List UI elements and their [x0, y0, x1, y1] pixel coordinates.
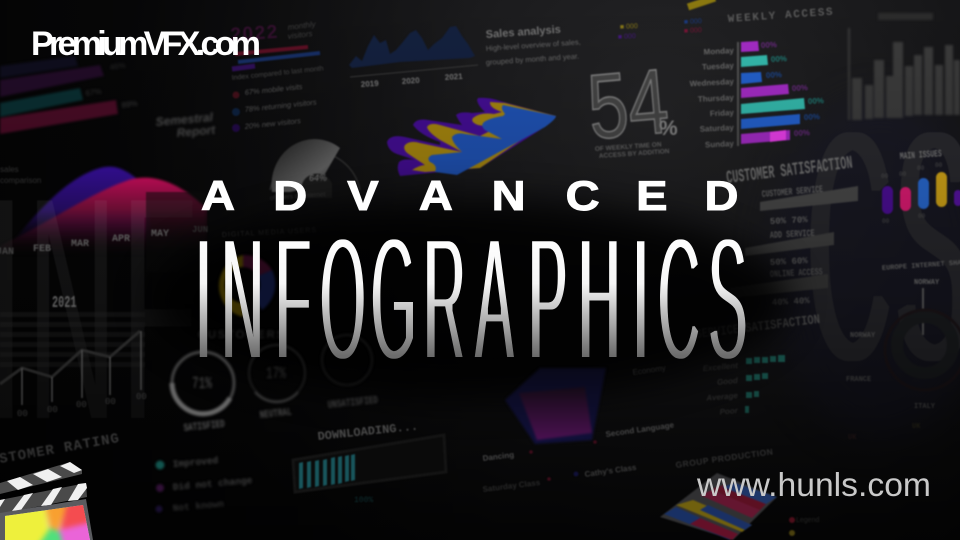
satisfaction rings: NEUTRAL: [259, 405, 293, 421]
mountain chart: [0, 167, 206, 258]
sales analysis text: grouped by month and year.: [486, 52, 579, 67]
month axis labels: JUN: [192, 225, 208, 235]
rating legend: [156, 455, 253, 514]
weekly access bar chart: Tuesday: [702, 61, 735, 72]
chart legend top: ■ 000: [684, 18, 702, 26]
satisfaction rings: 17%: [266, 365, 286, 384]
main issues capsules: [881, 149, 960, 225]
weekly access bar chart: Friday: [710, 108, 735, 118]
month axis labels: MAR: [71, 239, 89, 250]
54 percent stat: 54: [584, 50, 672, 159]
donut chart behind title: [198, 255, 286, 341]
europe internet share with rings: NORWAY: [850, 332, 876, 340]
monthly visitors panel: visitors: [287, 29, 313, 41]
radar labels: Saturday Class: [482, 478, 541, 494]
customer satisfaction panel: CUSTOMER SERVICE: [761, 185, 823, 201]
month axis labels: [0, 165, 208, 258]
sales area chart: 2021: [445, 72, 463, 82]
service satisfaction ratings: SERVICE SATISFACTION: [695, 312, 821, 342]
monthly visitors panel: 2022: [230, 22, 280, 46]
radar labels: Second Language: [605, 420, 675, 439]
line chart: 2021: 00: [17, 409, 28, 419]
title: INFOGRAPHICS: INFOGRAPHICS: [195, 200, 747, 398]
chart legend top: [618, 0, 715, 41]
group production label: [632, 363, 774, 470]
top-left bars: 89%: [121, 99, 138, 110]
radar chart: [505, 368, 606, 444]
weekly access bar chart: 00%: [771, 54, 787, 64]
customer satisfaction panel: CUSTOMER SATISFACTION: [725, 154, 854, 189]
chart legend top: ■ 000: [618, 33, 636, 41]
radar labels: [482, 420, 675, 494]
stacked table chart: Legend: [796, 517, 819, 524]
donut chart: 64%: [309, 173, 327, 183]
chart legend top: ■ 000: [684, 27, 702, 35]
line chart: 2021: [0, 294, 147, 419]
grey column chart: [848, 13, 960, 120]
radar labels: Dancing: [482, 450, 515, 463]
url: www.hunls.com: www.hunls.com: [696, 466, 931, 503]
weekly access bar chart: 00%: [761, 40, 777, 50]
rating legend: Improved: [172, 455, 219, 470]
weekly access bar chart: Monday: [703, 46, 735, 57]
wave chart: [387, 98, 556, 176]
service satisfaction ratings: Poor: [719, 406, 739, 417]
chart legend top: ■ 000: [620, 23, 638, 31]
main issues capsules: 00: [918, 213, 926, 220]
rating legend: Did not change: [172, 475, 253, 493]
digital media users label: DIGITAL MEDIA USERS: [222, 227, 317, 239]
line chart: 2021: 00: [76, 400, 87, 410]
weekly access bar chart: [689, 7, 835, 150]
satisfaction rings: UNSATISFIED: [327, 394, 379, 411]
month axis labels: APR: [112, 234, 130, 245]
europe internet share with rings: NORWAY: [914, 279, 940, 287]
line chart: 2021: 00: [47, 405, 58, 415]
weekly access bar chart: 00%: [792, 83, 808, 93]
donut chart: of users on internet: [270, 191, 326, 202]
sales analysis text: Sales analysis: [485, 24, 561, 41]
54 percent stat: ACCESS BY ADDITION: [599, 148, 670, 160]
europe internet share with rings: UK: [912, 423, 921, 431]
satisfaction rings: [172, 335, 379, 434]
radar labels: Cathy's Class: [584, 463, 637, 479]
monthly visitors panel: monthly: [287, 20, 317, 32]
semestral report label: Report: [176, 123, 217, 140]
customer satisfaction panel: 40% 40%: [772, 296, 811, 308]
weekly access bar chart: 00%: [794, 128, 810, 138]
monthly visitors panel: [230, 20, 324, 132]
customer satisfaction panel: 50% 60%: [770, 256, 809, 268]
downloading progress bar: [293, 420, 446, 505]
icon: Final Cut clapperboard: [0, 462, 96, 540]
main issues capsules: 00: [917, 165, 925, 172]
weekly access bar chart: 00%: [804, 112, 820, 122]
main issues capsules: 00: [881, 173, 889, 180]
group production label: Economy: [632, 363, 666, 377]
top-left bars: [0, 56, 138, 134]
sales area chart: 2019: [361, 79, 379, 89]
sales area chart: 2020: [402, 76, 420, 86]
weekly access bar chart: WEEKLY ACCESS: [727, 7, 835, 26]
weekly access bar chart: Saturday: [699, 123, 735, 134]
monthly visitors panel: 67% mobile visits: [244, 82, 303, 97]
month axis labels: sales: [0, 165, 19, 174]
satisfaction rings: SATISFIED: [183, 417, 226, 434]
monthly visitors panel: Index compared to last month: [231, 65, 324, 82]
customer satisfaction panel: ADD SERVICE: [770, 229, 815, 241]
europe internet share with rings: ITALY: [914, 403, 936, 411]
weekly access bar chart: Thursday: [698, 93, 735, 104]
rating legend: Not known: [172, 499, 225, 514]
54 percent stat: OF WEEKLY TIME ON: [595, 141, 662, 153]
dark block over mountain: [146, 192, 206, 272]
weekly access bar chart: Wednesday: [689, 77, 735, 88]
month axis labels: comparison: [0, 176, 41, 185]
main issues capsules: MAIN ISSUES: [900, 149, 942, 163]
europe internet share with rings: FRANCE: [846, 376, 871, 384]
satisfaction rings: 71%: [192, 375, 212, 394]
sales analysis text: High-level overview of sales,: [486, 37, 581, 53]
line chart: 2021: 00: [136, 392, 147, 402]
customer satisfaction panel: 50% 70%: [770, 215, 809, 227]
weekly access bar chart: 00%: [766, 70, 782, 80]
customer rating heading: STOMER RATING: [0, 431, 121, 468]
weekly access bar chart: Sunday: [705, 139, 735, 150]
europe internet share with rings: UK: [848, 434, 857, 442]
semestral report label: [155, 110, 217, 140]
donut chart: [270, 139, 360, 202]
month axis labels: FEB: [33, 244, 51, 255]
main issues capsules: 00: [899, 171, 907, 178]
logo: PremiumVFX.com: PremiumVFX.com: [31, 25, 261, 63]
sales analysis text: [485, 24, 581, 67]
service satisfaction ratings: Excellent: [702, 361, 738, 373]
line chart: 2021: 00: [105, 397, 116, 407]
service satisfaction ratings: Good: [717, 376, 739, 387]
service satisfaction ratings: Average: [705, 391, 739, 403]
europe internet share with rings: [846, 259, 960, 442]
stacked table chart: [660, 473, 819, 540]
downloading progress bar: 100%: [354, 496, 373, 505]
downloading progress bar: DOWNLOADING...: [317, 420, 419, 444]
customer satisfaction panel: ONLINE ACCESS: [770, 267, 823, 280]
top-left bars: 46%: [109, 61, 126, 72]
line chart: 2021: 2021: [52, 294, 76, 313]
main issues capsules: 00: [882, 218, 890, 225]
monthly visitors panel: 78% returning visitors: [244, 97, 317, 114]
weekly access bar chart: 00%: [808, 96, 824, 106]
month axis labels: MAY: [151, 229, 169, 240]
54 percent stat: %: [659, 117, 678, 140]
semestral report label: Semestral: [155, 110, 214, 129]
main issues capsules: 00: [935, 162, 943, 169]
top-left bars: 67%: [85, 87, 102, 98]
monthly visitors panel: 20% new visitors: [243, 116, 301, 131]
customer satisfaction panel: [725, 154, 858, 308]
title: ADVANCED: ADVANCED: [201, 173, 738, 219]
service satisfaction ratings: [695, 312, 821, 417]
donut chart behind title: CUSTOMERS: [198, 329, 286, 341]
group production label: GROUP PRODUCTION: [675, 446, 774, 470]
sales area chart: [349, 26, 478, 89]
